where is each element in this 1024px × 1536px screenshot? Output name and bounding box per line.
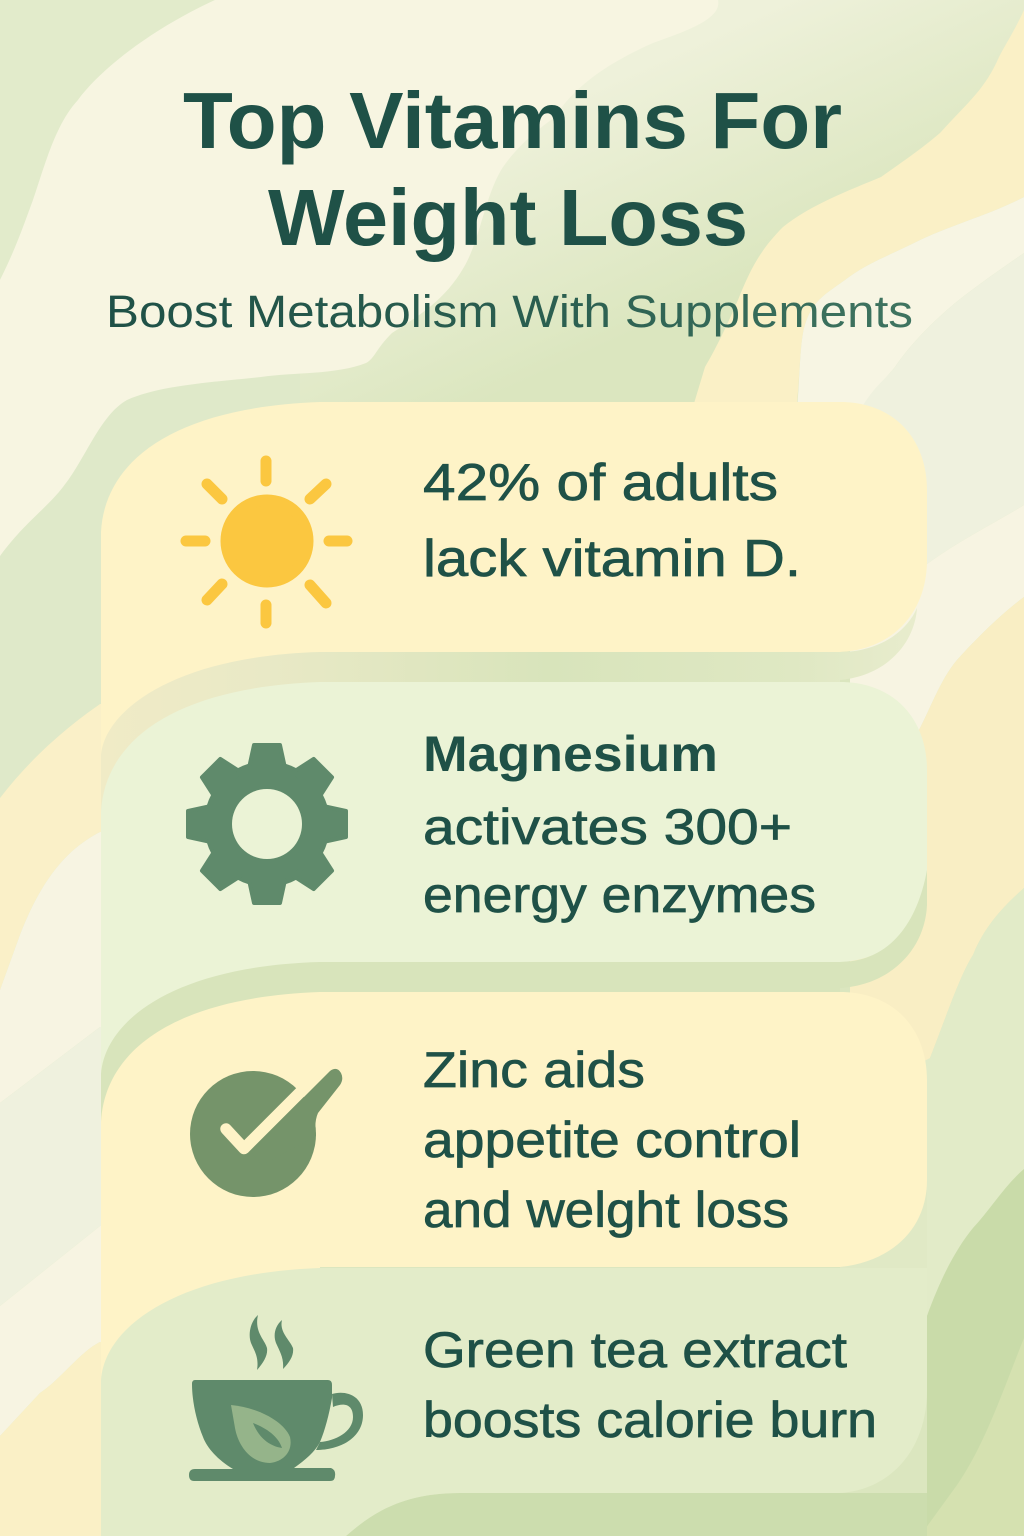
text: zinc fact: Zinc aids [423, 1042, 645, 1098]
text: magnesium fact: Magnesium [423, 726, 718, 782]
icon: gear [188, 745, 346, 903]
panel: vitamin D [101, 402, 927, 830]
icon: check badge [190, 1069, 342, 1197]
text: vitamin D fact [423, 454, 801, 588]
text: zinc fact [423, 1042, 801, 1238]
card shape: green tea [101, 1268, 927, 1536]
gap band under vitamin D card [101, 608, 917, 830]
text: vitamin D fact: lack vitamin D. [423, 530, 801, 588]
card shape: magnesium [101, 682, 927, 1150]
subtitle: Boost Metabolism With Supplements [106, 286, 913, 337]
gap band under magnesium card [101, 870, 927, 1150]
card shape: vitamin D [101, 402, 927, 830]
text: green tea fact [423, 1322, 877, 1448]
text: vitamin D fact: 42% of adults [423, 454, 778, 512]
text: magnesium fact: energy enzymes [423, 867, 816, 923]
panel: magnesium [101, 682, 927, 1150]
title: Top Vitamins For [183, 76, 842, 165]
bottom background wave [346, 1493, 927, 1536]
text: green tea fact: Green tea extract [423, 1322, 847, 1378]
cup body and saucer [189, 1380, 335, 1481]
icon: sun [186, 461, 347, 623]
text: zinc fact: appetite control [423, 1112, 801, 1168]
cup handle [316, 1393, 363, 1450]
panel: green tea [101, 1268, 927, 1536]
text: magnesium fact: activates 300+ [423, 799, 792, 855]
title: Weight Loss [268, 173, 748, 262]
card shape: zinc [101, 992, 927, 1400]
steam [250, 1315, 293, 1370]
title [183, 76, 842, 262]
panel: zinc [101, 992, 927, 1400]
text: zinc fact: and welght loss [423, 1182, 789, 1238]
text: magnesium fact [423, 726, 816, 923]
green tea card corner behind zinc card [840, 1190, 927, 1320]
icon: tea cup [189, 1315, 363, 1481]
text: green tea fact: boosts calorie burn [423, 1392, 877, 1448]
tea leaf [231, 1405, 291, 1463]
